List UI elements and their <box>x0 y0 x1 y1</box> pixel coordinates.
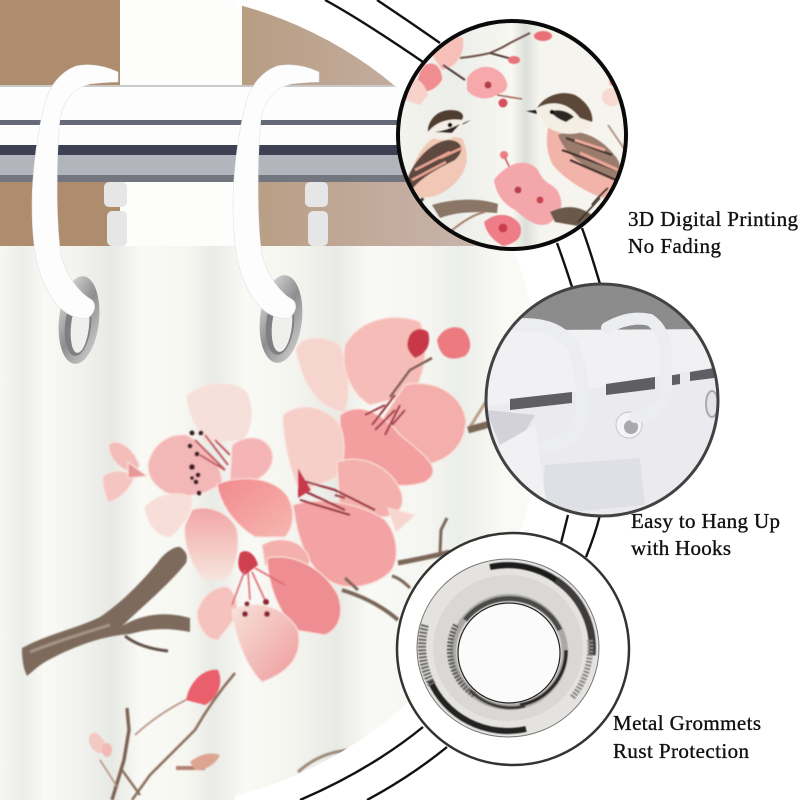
hook right <box>233 65 319 318</box>
buds upper <box>390 327 470 397</box>
right bird <box>526 93 625 205</box>
curtain close-up <box>480 366 720 520</box>
curtain rod <box>0 85 406 182</box>
caption: easy to hang up: Easy to Hang Up <box>631 509 780 533</box>
flower: lower <box>197 540 341 682</box>
caption: easy to hang up <box>631 509 780 560</box>
caption: metal grommets: Rust Protection <box>613 739 750 763</box>
room background <box>0 0 478 246</box>
main photo: curtain on rod <box>0 0 562 800</box>
flower: upper left <box>145 384 293 580</box>
dark upper area <box>512 286 692 330</box>
caption: 3D digital printing: 3D Digital Printing <box>628 207 798 231</box>
main branch <box>22 547 190 676</box>
grommet ring <box>417 559 599 737</box>
rod in close-up <box>504 329 700 340</box>
flower: upper right <box>296 317 466 486</box>
grommet eye <box>616 412 642 438</box>
caption: 3D digital printing <box>628 207 798 258</box>
rail slot <box>510 368 714 410</box>
grommet edge right <box>706 391 718 417</box>
right branch <box>342 395 490 620</box>
circle: metal grommet detail <box>397 533 629 765</box>
circle: 3D digital printing detail <box>398 21 626 249</box>
hook left <box>32 65 118 318</box>
lower buds and twigs <box>85 670 350 800</box>
grommet right <box>260 275 302 363</box>
blossoms in circle <box>402 31 625 246</box>
main blossom artwork <box>22 317 490 800</box>
caption: 3D digital printing: No Fading <box>628 234 722 258</box>
caption: metal grommets: Metal Grommets <box>613 711 761 735</box>
curtain fabric <box>0 246 560 800</box>
hook 1 <box>512 318 566 330</box>
circle: hook detail <box>480 280 720 520</box>
left bird <box>408 109 471 202</box>
rail tabs <box>104 182 328 246</box>
hook 2 <box>607 319 666 417</box>
caption: metal grommets <box>613 711 761 763</box>
grommet left <box>58 276 100 364</box>
connector arcs <box>300 0 600 800</box>
flower: centre <box>283 407 415 587</box>
small flower left <box>103 442 147 502</box>
caption: easy to hang up: with Hooks <box>631 536 731 560</box>
